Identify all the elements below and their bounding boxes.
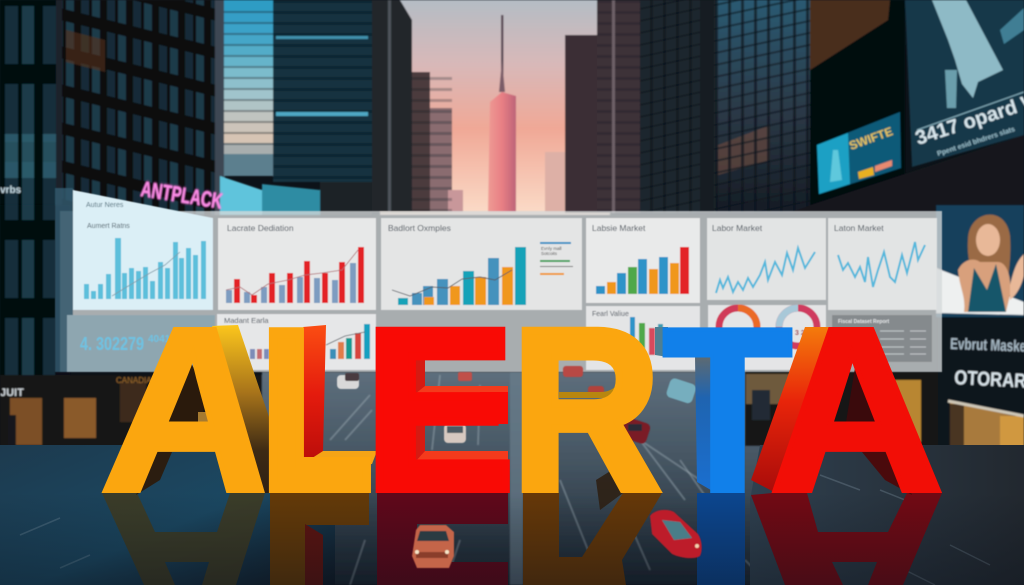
band backing [60, 211, 942, 372]
background: city skyline [0, 0, 1024, 215]
floor surface right [750, 445, 1024, 585]
panel: blue orange teal columns: Evnly mall [541, 246, 562, 251]
panel: donut charts [708, 305, 826, 370]
letter E: E [364, 282, 515, 539]
3D word ALERTA [96, 278, 946, 541]
floor surface left [0, 445, 335, 585]
car [444, 424, 466, 443]
panel: red and blue columns [218, 218, 376, 310]
left storefront: CANADIAN [116, 376, 158, 385]
panel: red and blue columns: Lacrate Dediation [227, 223, 294, 233]
panel: big number readout: 4. 302279 [80, 334, 144, 354]
road [262, 372, 770, 585]
car [337, 373, 359, 389]
panel: blue bar chart [73, 190, 213, 310]
left storefront [0, 205, 270, 447]
floor reflection of letters [0, 493, 1024, 585]
billboard right wall [790, 135, 1024, 212]
panel: small trend chart [217, 314, 376, 370]
car [458, 372, 472, 381]
panel: blue orange teal columns [381, 218, 582, 310]
left glass towers [0, 0, 412, 215]
extrusion: R [559, 372, 626, 510]
panel: data table: Fiscal Dataset Report [838, 319, 889, 325]
reflection: last A [751, 493, 942, 585]
left storefront: JUIT [0, 387, 24, 399]
car [665, 377, 697, 404]
central tower with spire [488, 15, 516, 212]
panel: small trend chart: Madant Earla [224, 316, 269, 325]
extrusion: E [415, 358, 508, 462]
reflection fade [0, 493, 1024, 585]
small billboard: SWIFTE [847, 124, 895, 153]
car [618, 416, 651, 445]
reflection: first A [102, 493, 265, 585]
letter L: L [261, 285, 372, 536]
car: red foreground [650, 510, 702, 558]
panel: labour market columns [586, 218, 700, 303]
sky [380, 0, 610, 215]
panel: small columns: Fearl Valiue [592, 311, 629, 318]
letter A last: A [762, 279, 946, 540]
panel: labour market columns: Labsie Market [592, 223, 646, 233]
building sign: vrbs [0, 185, 22, 196]
panel: labour market line 2: Laton Market [834, 223, 884, 233]
neon sign: ANTPLACK [139, 176, 225, 214]
reflection: R [523, 493, 662, 585]
E middle bar extension [480, 392, 508, 424]
panel frame left [55, 188, 73, 372]
letter T: T [662, 278, 793, 541]
panel: labour market line 1: Labor Market [712, 223, 763, 233]
extrusion: T [655, 327, 716, 493]
letter A: A [96, 278, 283, 541]
panel: donut charts: 3 2 [795, 330, 805, 337]
reflection: E [377, 493, 508, 585]
panel: small columns [586, 306, 700, 370]
right towers [565, 0, 905, 213]
panel: data table [832, 315, 932, 362]
woman billboard [936, 205, 1024, 317]
translucent dashboard band [55, 188, 942, 372]
panel: blue bar chart: Aumert Ratns [87, 223, 130, 230]
distant buildings [412, 72, 567, 212]
large billboard [905, 0, 1024, 167]
reflection: T [697, 493, 745, 585]
cars on road [337, 366, 702, 568]
letter R: R [512, 282, 660, 538]
car [588, 386, 604, 395]
panel: blue orange teal columns: Badlort Oxmples [388, 223, 451, 233]
extrusion: first A [136, 325, 271, 495]
small billboard [817, 112, 901, 194]
right black billboard [938, 315, 1024, 447]
panel: big number readout: 4041 [148, 334, 171, 345]
neon sign: ANTPLACK [139, 176, 225, 214]
panel: blue bar chart: Autur Neres [86, 202, 124, 209]
panel: big number readout [67, 315, 215, 372]
panel: labour market line 1 [707, 218, 826, 300]
panel: blue orange teal columns: Sotcoits [541, 251, 558, 256]
large billboard: Ppent esid bhdrers slats [936, 126, 1016, 158]
extrusion: L [303, 325, 377, 464]
right storefront [745, 372, 945, 446]
panel: labour market line 2 [828, 218, 937, 310]
car [563, 366, 583, 377]
extrusion: last A [751, 327, 912, 495]
reflection: L [270, 493, 369, 585]
lower street backdrop [0, 205, 1024, 585]
car: orange foreground [412, 525, 454, 568]
